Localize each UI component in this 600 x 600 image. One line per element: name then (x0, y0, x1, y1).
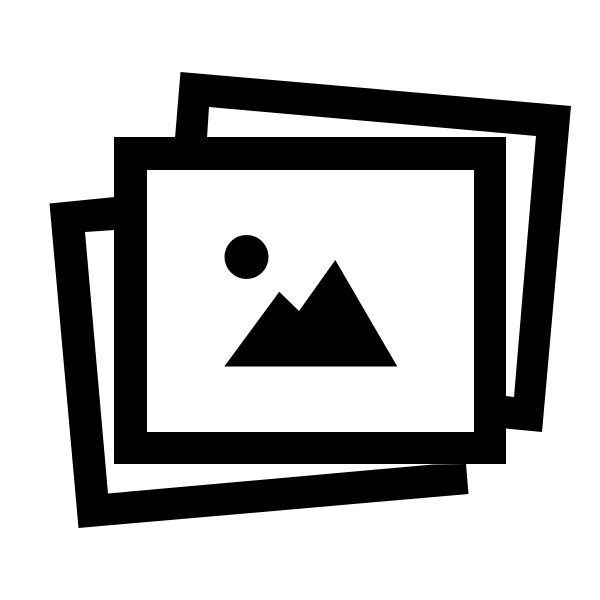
icon: mountains (224, 260, 397, 366)
icon: sun (224, 235, 268, 279)
icon: front photo frame (114, 137, 506, 464)
icon: left photo frame (50, 197, 468, 528)
icon: back photo frame (175, 72, 571, 432)
